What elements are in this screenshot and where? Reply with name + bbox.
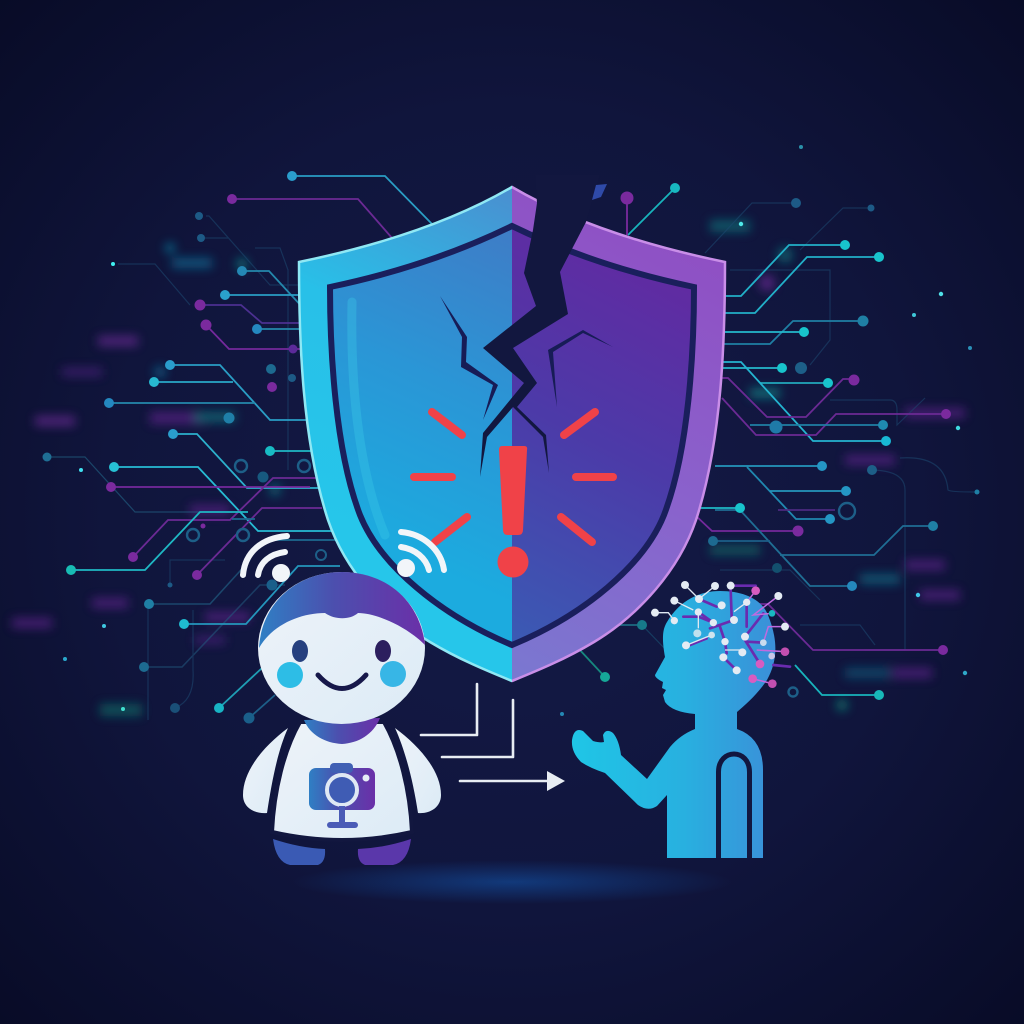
main crack — [480, 175, 600, 477]
warning rays — [414, 412, 613, 542]
brain light connections — [655, 585, 747, 650]
circuit lines and nodes: left side — [71, 176, 432, 718]
shield rim — [299, 187, 725, 681]
icon: camera on robot chest — [309, 763, 375, 828]
exclamation mark — [498, 446, 528, 578]
robot smile — [318, 675, 366, 688]
robot eyes — [292, 640, 391, 662]
icon: wifi signal left — [243, 536, 290, 582]
person arch detail — [718, 754, 750, 858]
crack fragment — [592, 184, 607, 200]
robot cheeks — [277, 661, 406, 688]
arrows from robot to person — [421, 684, 565, 791]
robot character — [243, 572, 441, 865]
brain purple connections — [683, 586, 790, 670]
robot feet — [273, 839, 411, 865]
robot collar — [304, 718, 380, 744]
brain white nodes — [651, 581, 789, 674]
floor glow — [292, 860, 732, 904]
left side crack — [440, 296, 498, 420]
icon: wifi signal right — [397, 532, 444, 577]
brain network — [651, 581, 790, 688]
blurred data glows — [12, 220, 965, 716]
robot hair — [259, 572, 425, 648]
brain pink connections — [747, 591, 785, 684]
right side crack — [548, 330, 613, 407]
person silhouette — [572, 591, 775, 858]
robot head — [258, 572, 425, 724]
faint circuit board traces — [47, 203, 975, 720]
shield face — [330, 226, 694, 645]
shield — [299, 175, 725, 681]
robot arms — [243, 728, 441, 813]
circuit lines and nodes: right side — [578, 188, 946, 695]
brain pink nodes — [748, 586, 789, 688]
robot torso — [272, 722, 412, 840]
